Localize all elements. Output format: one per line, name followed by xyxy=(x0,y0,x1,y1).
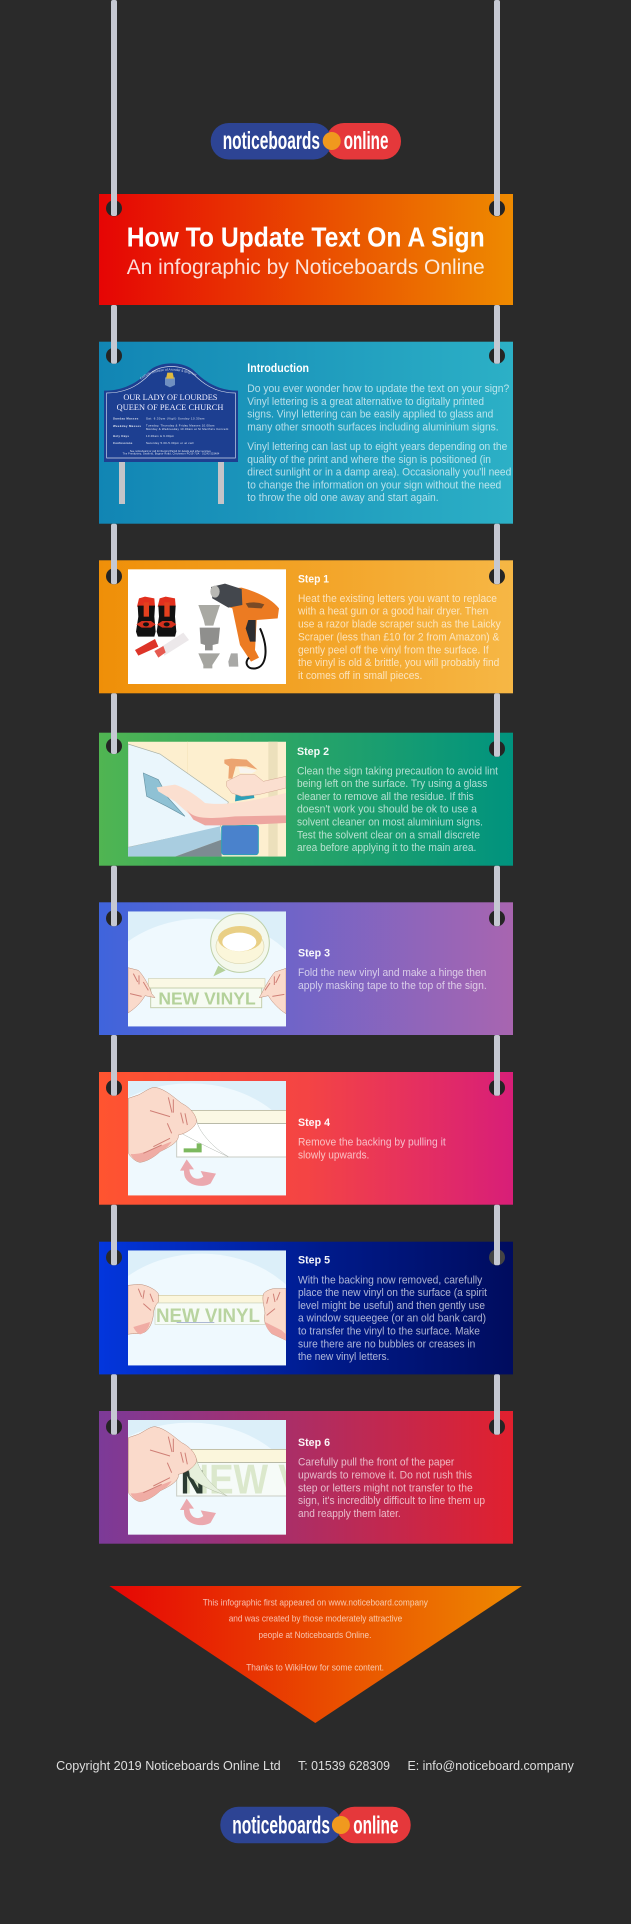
logo pill: blue xyxy=(211,123,332,160)
image: scrapers and heat gun xyxy=(128,569,286,684)
step 2 body text xyxy=(297,765,498,854)
image: church sign: Tuesday, Thursday & Friday Masses 10.00am xyxy=(146,424,215,428)
image: cleaning the sign xyxy=(128,742,286,857)
step 1 body text xyxy=(297,593,501,682)
step 5 heading: Step 5 xyxy=(298,1255,330,1267)
image: peeling the paper off: N xyxy=(181,1464,205,1501)
subtitle: An infographic by Noticeboards Online xyxy=(127,255,485,279)
step 5 body text: to transfer the vinyl to the surface. Make xyxy=(298,1326,480,1338)
logo: bottom xyxy=(220,1807,411,1843)
image: peeling the paper off: NEW V xyxy=(183,1455,303,1502)
step 1 background xyxy=(99,560,513,693)
image: church sign xyxy=(104,363,238,504)
hanging holes xyxy=(106,738,505,757)
intro background xyxy=(99,342,513,524)
step 2 body text: solvent cleaner on most aluminium signs. xyxy=(297,817,483,829)
footer contact line xyxy=(56,1759,575,1773)
step 1 body text: with a heat gun or a good hair dryer. Then xyxy=(297,606,488,618)
closing text xyxy=(203,1597,428,1673)
panel: step 1 xyxy=(99,560,513,693)
step 5 body text: level might be useful) and then gently use xyxy=(298,1300,485,1312)
step 2 body text: cleaner to remove all the residue. If this xyxy=(297,791,474,803)
intro body text: Vinyl lettering is a great alternative to digitally printed xyxy=(247,396,484,408)
image: peeling the paper off xyxy=(128,1420,286,1535)
image: placing the new vinyl xyxy=(128,1250,286,1366)
step 1 body text: Heat the existing letters you want to replace xyxy=(298,593,497,605)
closing text: This infographic first appeared on www.noticeboard.company xyxy=(203,1597,428,1607)
image: church sign: Monday & Wednesday 10.00am at St Martha's Convent xyxy=(146,427,229,431)
image: church sign: Saturday 5.00-5.30pm or at call xyxy=(146,441,194,445)
hanging holes xyxy=(106,1419,505,1435)
step 6 heading: Step 6 xyxy=(298,1437,330,1449)
panel: title xyxy=(99,194,513,305)
image: church sign: Weekday Masses xyxy=(113,424,141,428)
image: church sign: Sat: 6.30pm (Vigil) Sunday 10.30am xyxy=(146,417,205,421)
intro heading: Introduction xyxy=(247,363,309,375)
image: church sign: 10.00am & 6.00pm xyxy=(146,434,175,438)
hanging holes xyxy=(106,568,505,584)
step 5 body text: With the backing now removed, carefully xyxy=(298,1274,483,1286)
step 6 body text: step or letters might not transfer to the xyxy=(298,1482,473,1494)
step 6 body text: upwards to remove it. Do not rush this xyxy=(298,1469,472,1481)
step 4 background xyxy=(99,1072,513,1205)
logo wordmark: noticeboards xyxy=(232,1811,330,1839)
panel: step 6 xyxy=(99,1411,513,1544)
step 6 body text: and reapply them later. xyxy=(298,1508,401,1520)
image: new vinyl with masking tape xyxy=(128,911,286,1026)
step 1 body text: use a razor blade scraper such as the Laicky xyxy=(298,619,501,631)
step 2 body text: area before applying it to the main area. xyxy=(297,842,476,854)
intro body text: signs. Vinyl lettering can be easily applied to glass and xyxy=(247,409,493,421)
logo pill: red xyxy=(336,1807,411,1843)
logo wordmark: noticeboards xyxy=(223,127,320,155)
image: church sign: Holy Days xyxy=(113,434,129,438)
step 5 body text: place the new vinyl on the surface (a spirit xyxy=(298,1287,487,1299)
step 2 body text: doesn't work you should be ok to use a xyxy=(297,804,478,816)
closing text: and was created by those moderately attractive xyxy=(229,1614,402,1624)
step 4 body text: slowly upwards. xyxy=(298,1149,369,1161)
panel: step 5 xyxy=(99,1242,513,1374)
logo wordmark: online xyxy=(344,127,388,155)
panel: step 2 xyxy=(99,733,513,866)
step 3 body text: apply masking tape to the top of the sign. xyxy=(298,980,487,992)
step 5 background xyxy=(99,1242,513,1374)
panel: closing triangle xyxy=(109,1586,522,1723)
image: church sign: Catholic Diocese of Arundel & Brighton xyxy=(140,368,196,380)
rope: left xyxy=(111,0,117,1435)
logo pill: blue xyxy=(220,1807,342,1843)
step 6 body text xyxy=(298,1457,485,1520)
rope: right xyxy=(494,0,500,1435)
step 5 body text: a window squeegee (or an old bank card) xyxy=(298,1313,486,1325)
step 2 body text: Test the solvent clear on a small discrete xyxy=(297,829,480,841)
telephone: T: 01539 628309 xyxy=(298,1759,390,1773)
closing text: people at Noticeboards Online. xyxy=(258,1630,371,1640)
copyright: Copyright 2019 Noticeboards Online Ltd xyxy=(56,1759,281,1773)
step 4 body text: Remove the backing by pulling it xyxy=(298,1136,446,1148)
step 3 body text: Fold the new vinyl and make a hinge then xyxy=(298,967,486,979)
logo pill: red xyxy=(326,123,401,160)
step 3 background xyxy=(99,902,513,1035)
image: church sign: Confessions xyxy=(113,441,133,445)
triangle shape xyxy=(109,1586,522,1723)
hanging holes xyxy=(106,1080,505,1096)
step 1 body text: Scraper (less than £10 for 2 from Amazon) & xyxy=(298,631,500,643)
logo dot xyxy=(332,1816,350,1834)
intro body text: direct sunlight or in a damp area). Occasionally you'll need xyxy=(247,467,511,479)
step 6 body text: sign, it's incredibly difficult to line them up xyxy=(298,1495,485,1507)
logo: top xyxy=(211,123,401,160)
logo wordmark: online xyxy=(353,1811,398,1839)
image: new vinyl with masking tape: NEW VINYL xyxy=(158,988,256,1008)
image: church sign: See noticeboard or call for Rectory/Parish for details and other services xyxy=(130,450,211,453)
step 2 background xyxy=(99,733,513,866)
hanging holes xyxy=(106,910,505,926)
step 5 body text: the new vinyl letters. xyxy=(298,1351,389,1363)
intro body text: to change the information on your sign without the need xyxy=(247,480,501,492)
title: How To Update Text On A Sign xyxy=(127,222,485,253)
logo dot xyxy=(323,132,341,150)
intro body text xyxy=(247,383,511,504)
hanging holes xyxy=(106,348,505,364)
intro body text: to throw the old one away and start again. xyxy=(247,492,439,504)
step 5 body text: sure there are no bubbles or creases in xyxy=(298,1338,475,1350)
panel: step 3 xyxy=(99,902,513,1035)
step 1 body text: it comes off in small pieces. xyxy=(298,670,422,682)
step 1 body text: the vinyl is old & brittle, you will probably find xyxy=(298,657,499,669)
image: removing the backing xyxy=(128,1081,286,1196)
step 2 heading: Step 2 xyxy=(297,746,329,758)
panel: step 4 xyxy=(99,1072,513,1205)
step 2 body text: Clean the sign taking precaution to avoid lint xyxy=(297,765,498,777)
hanging holes xyxy=(106,200,505,216)
step 6 background xyxy=(99,1411,513,1544)
image: church sign: The Presbytery, Seafield, Bognor Road, Chichester PO19 7UA · 01243 533484 xyxy=(123,453,220,456)
intro body text: quality of the print and where the sign is positioned (in xyxy=(247,454,491,466)
intro body text: Do you ever wonder how to update the text on your sign? xyxy=(247,383,509,395)
image: church sign: QUEEN OF PEACE CHURCH xyxy=(117,403,223,412)
intro body text: many other smooth surfaces including aluminium signs. xyxy=(247,422,499,434)
step 4 body text xyxy=(298,1136,446,1161)
step 4 heading: Step 4 xyxy=(298,1117,331,1129)
image: church sign: Sunday Masses xyxy=(113,417,139,421)
image: placing the new vinyl: NEW VINYL xyxy=(156,1306,260,1327)
panel: introduction xyxy=(99,342,513,524)
email: E: info@noticeboard.company xyxy=(408,1759,575,1773)
step 3 heading: Step 3 xyxy=(298,947,330,959)
step 2 body text: being left on the surface. Try using a glass xyxy=(297,778,488,790)
step 1 heading: Step 1 xyxy=(298,574,329,586)
title background xyxy=(99,194,513,305)
intro body text: Vinyl lettering can last up to eight years depending on the xyxy=(247,441,507,453)
step 5 body text xyxy=(298,1274,487,1363)
step 6 body text: Carefully pull the front of the paper xyxy=(298,1457,455,1469)
closing text: Thanks to WikiHow for some content. xyxy=(246,1663,384,1673)
image: church sign: OUR LADY OF LOURDES xyxy=(123,393,218,402)
hanging holes xyxy=(106,1249,505,1265)
step 1 body text: gently peel off the vinyl from the surface. If xyxy=(298,644,490,656)
step 3 body text xyxy=(298,967,487,992)
